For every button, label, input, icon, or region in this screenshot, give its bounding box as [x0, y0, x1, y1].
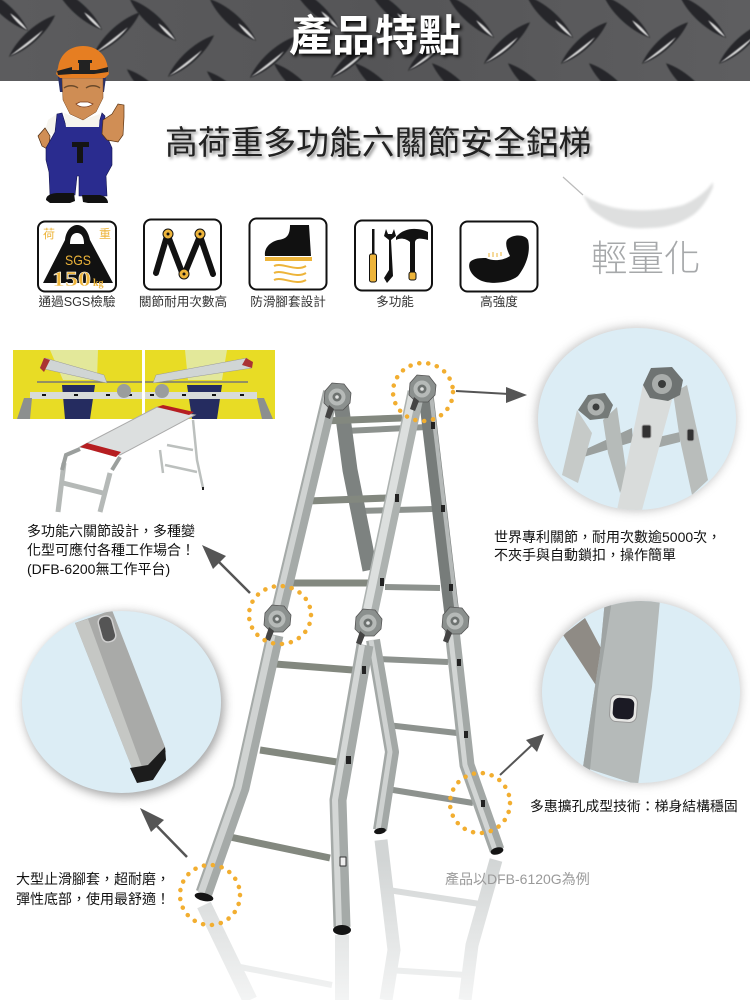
- hinge joints: [264, 375, 469, 645]
- icon label: strength: 高強度: [480, 295, 518, 309]
- icon label: boot: 防滑腳套設計: [250, 295, 326, 309]
- icon label: SGS: 通過SGS檢驗: [39, 295, 115, 309]
- heading: product title: 高荷重多功能六關節安全鋁梯: [165, 124, 591, 161]
- icon: high strength arm: [460, 222, 538, 292]
- text: joint feature: [494, 529, 721, 562]
- panel: yellow photo right (folding deck): [145, 350, 275, 419]
- reflection of ladder on floor: [204, 840, 496, 1000]
- text: platform feature: [27, 523, 195, 577]
- front section rungs and rails: [201, 392, 416, 927]
- arrow: to foot detail: [140, 808, 187, 857]
- platform ladder photo: [58, 405, 203, 512]
- text: rubber foot: 大型止滑腳套，超耐磨，: [16, 871, 170, 887]
- rubber feet: [194, 827, 504, 935]
- arrow: to platform: [202, 545, 250, 593]
- icon: SGS 150 kg load weight: 150: [52, 267, 91, 291]
- icon label: tools: 多功能: [376, 295, 414, 309]
- header band: diamond plate: [0, 0, 750, 81]
- icon: feather: [563, 177, 713, 228]
- text: platform feature: 化型可應付各種工作場合！: [27, 542, 195, 558]
- panel: rubber foot close-up circle: [22, 610, 224, 797]
- text: rail forming: 多惠擴孔成型技術：梯身結構穩固: [530, 798, 738, 814]
- text: platform feature: (DFB-6200無工作平台): [27, 561, 170, 577]
- text: joint feature: 不夾手與自動鎖扣，操作簡單: [494, 546, 676, 562]
- dotted circle: middle joint: [249, 586, 311, 644]
- icon: SGS 150 kg load weight: SGS: [65, 252, 91, 268]
- arrow: to hole detail: [500, 734, 544, 775]
- icon: SGS 150 kg load weight: 重: [99, 227, 111, 241]
- icon: SGS 150 kg load weight: 荷: [43, 227, 55, 241]
- dotted circle: rail hole: [450, 773, 510, 833]
- icon: SGS 150 kg load weight: [38, 222, 116, 292]
- back section rungs and rails: [340, 395, 497, 850]
- panel: yellow photo left (folding deck): [13, 350, 142, 419]
- text: rubber foot: [16, 871, 170, 907]
- dotted circle: top joint: [393, 363, 453, 421]
- ladder: [194, 375, 504, 935]
- text: product note: 產品以DFB-6120G為例: [445, 871, 590, 887]
- mascot: worker with hard hat giving thumbs up: [38, 46, 124, 203]
- icon: multi-function tools: [355, 220, 432, 290]
- panel: joint close-up circle: [536, 327, 736, 511]
- rung bolts: [340, 422, 485, 866]
- heading: 產品特點: 產品特點: [289, 13, 461, 61]
- text: rubber foot: 彈性底部，使用最舒適！: [16, 891, 170, 907]
- arrow: to top-right detail: [456, 387, 527, 403]
- icon label: joints: 關節耐用次數高: [139, 295, 227, 309]
- icon: non-slip boot: [250, 218, 326, 290]
- label: 輕量化: 輕量化: [591, 238, 700, 279]
- text: platform feature: 多功能六關節設計，多種變: [27, 523, 195, 539]
- panel: rail hole close-up circle: [540, 600, 740, 785]
- icon: folding joints: [144, 220, 221, 290]
- dotted circle: foot: [180, 865, 240, 925]
- text: joint feature: 世界專利關節，耐用次數逾5000次，: [494, 529, 721, 545]
- icon: SGS 150 kg load weight: kg: [93, 278, 104, 289]
